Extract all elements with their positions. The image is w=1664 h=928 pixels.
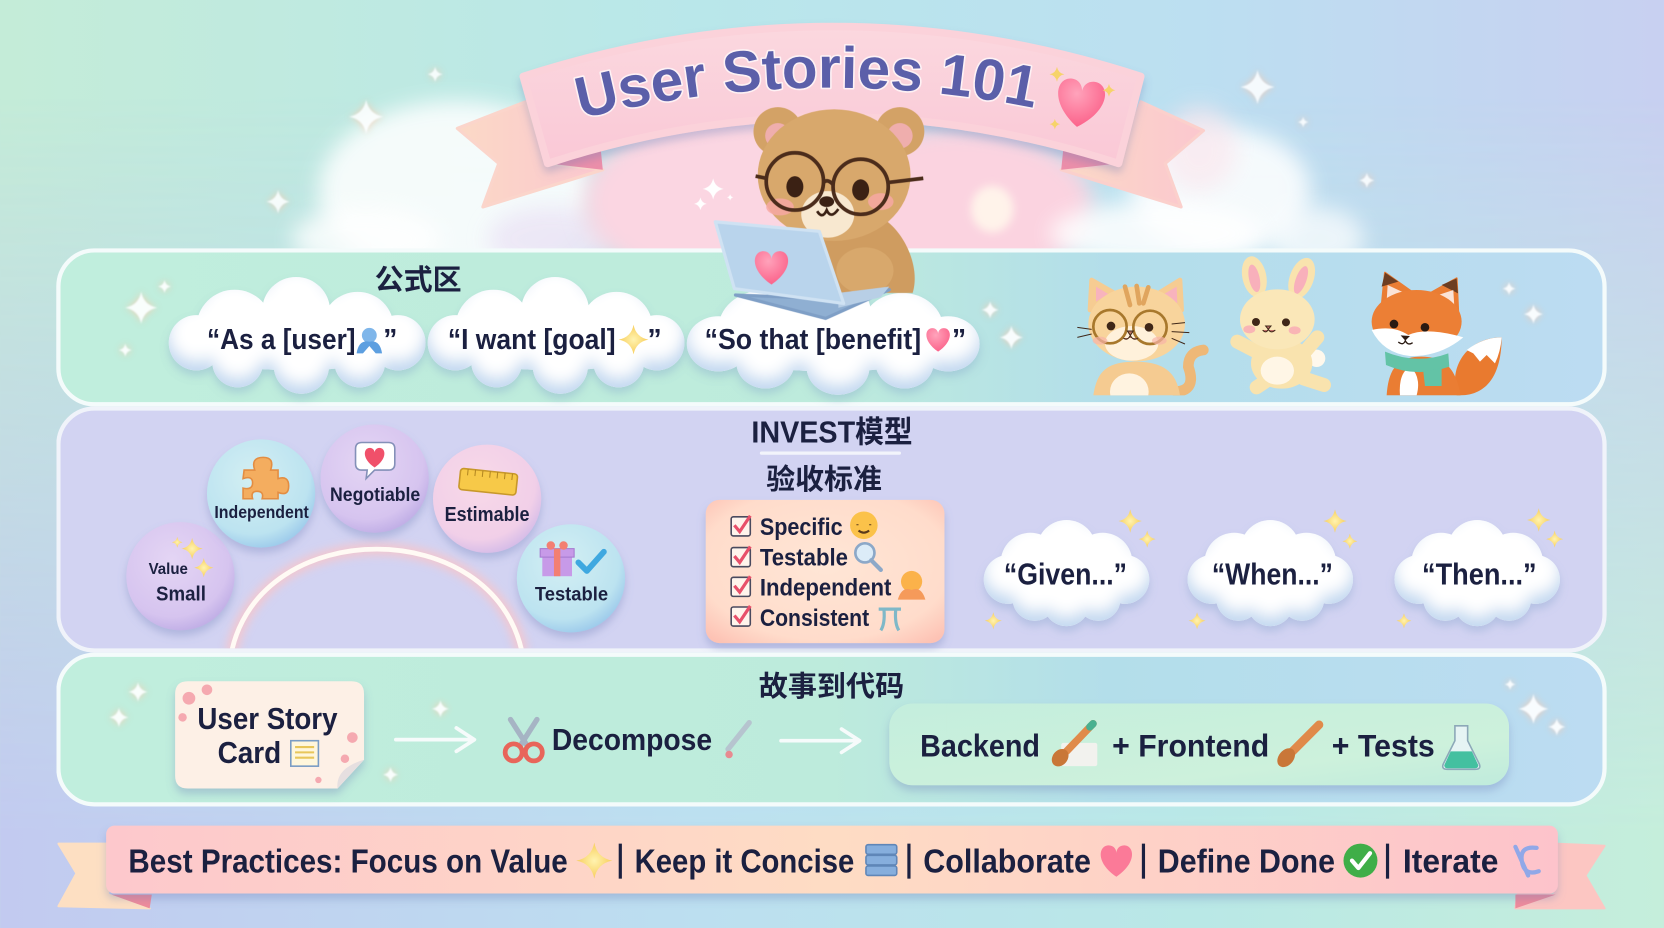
icon: gift and check	[540, 541, 604, 576]
bear cheeks	[766, 193, 894, 215]
icon: scissors	[505, 719, 542, 761]
cloud: given	[984, 509, 1156, 629]
panel: INVEST model	[58, 409, 1605, 653]
arrow: card to decompose	[396, 728, 474, 751]
panel background	[58, 250, 1605, 404]
heading: formula: 公式区	[375, 265, 462, 297]
ribbon left tail	[58, 844, 152, 908]
background clouds	[284, 90, 1371, 248]
bear ears	[753, 107, 924, 156]
item: independent: Independent	[760, 574, 891, 601]
heading: INVEST model: INVEST模型	[751, 415, 913, 450]
arrow: decompose to result	[781, 729, 860, 752]
cloud: then: “Then...”	[1422, 557, 1537, 592]
user story card: Card	[218, 735, 281, 770]
ribbon right tail	[1515, 844, 1605, 908]
best practices ribbon: Define Done	[1158, 842, 1335, 879]
badge: independent	[207, 439, 315, 548]
result pill	[889, 704, 1509, 785]
icon: pipette	[725, 723, 749, 758]
item: specific	[731, 511, 878, 541]
item: independent	[731, 571, 925, 601]
result pill: Backend	[920, 728, 1040, 764]
title: User Stories 101	[573, 44, 1036, 117]
bear body	[798, 218, 915, 293]
item: specific: Specific	[760, 514, 843, 541]
icon: heart	[926, 328, 950, 352]
icon: heart	[1101, 845, 1132, 877]
sparkles	[119, 280, 1543, 357]
cloud: as a user: ”	[383, 324, 397, 356]
badge: negotiable: Negotiable	[330, 485, 420, 506]
cloud: I want goal: “I want [goal]	[448, 324, 616, 356]
cloud: given: “Given...”	[1004, 557, 1127, 592]
badge: testable	[517, 524, 625, 632]
cloud: when	[1187, 509, 1357, 629]
icon: sparkle	[619, 325, 648, 354]
icon: iterate	[1515, 847, 1539, 875]
cloud: I want goal: ”	[647, 324, 662, 356]
icon: laptop heart	[755, 251, 788, 285]
cloud: as a user: “As a [user]	[207, 324, 356, 356]
decompose label: Decompose	[552, 722, 712, 757]
badge: small: Value	[149, 561, 188, 578]
sparkles	[109, 679, 1565, 782]
icon: title heart	[1050, 67, 1115, 130]
ribbon text: Best Practices: Focus on Value	[128, 842, 568, 879]
item: testable: Testable	[760, 545, 848, 572]
ribbon body	[106, 826, 1558, 894]
cloud: when: “When...”	[1212, 557, 1333, 592]
title banner	[456, 22, 1205, 208]
heading underline	[760, 452, 901, 455]
cloud: so that benefit: “So that [benefit]	[705, 324, 921, 356]
mascot: fox	[1372, 273, 1502, 395]
icon: user	[357, 328, 382, 353]
result pill: + Frontend	[1112, 728, 1269, 764]
badge: estimable	[433, 445, 541, 553]
icon: puzzle	[243, 457, 289, 499]
icon: speech bubble heart	[356, 443, 395, 479]
banner body	[523, 27, 1141, 163]
badge: negotiable	[321, 424, 429, 533]
bear head	[758, 109, 911, 241]
sparkles by bear	[694, 178, 733, 210]
mascot: bunny	[1237, 254, 1325, 389]
best practices ribbon: Keep it Concise	[635, 842, 854, 879]
panel background	[58, 409, 1605, 651]
bear eyes and nose	[786, 176, 869, 207]
best practices ribbon	[58, 826, 1605, 908]
panel: formula zone	[58, 250, 1605, 410]
icon: backend brush	[1048, 724, 1097, 770]
best practices ribbon: Iterate	[1403, 842, 1498, 879]
item: testable	[731, 543, 881, 572]
panel background	[58, 655, 1605, 804]
bear arm	[836, 247, 894, 294]
laptop	[715, 222, 889, 318]
heading: story to code: 故事到代码	[759, 671, 904, 703]
heading: acceptance criteria: 验收标准	[766, 464, 882, 496]
checklist card	[706, 500, 944, 643]
cloud: I want goal	[428, 277, 684, 394]
icon: check	[1343, 844, 1377, 878]
item: consistent: Consistent	[760, 605, 869, 632]
cloud: as a user	[169, 277, 426, 394]
user story card: User Story	[197, 701, 337, 736]
banner right tail	[1061, 102, 1203, 207]
bear glasses	[756, 153, 923, 214]
icon: value stars	[172, 537, 213, 577]
badge: independent: Independent	[214, 502, 309, 522]
panel: story to code	[58, 655, 1605, 804]
mascot: cat	[1077, 280, 1203, 410]
icon: frontend brush	[1274, 725, 1319, 771]
mascot: bear with laptop	[694, 107, 924, 318]
result pill: + Tests	[1332, 728, 1435, 764]
badge: estimable: Estimable	[445, 504, 530, 526]
badge: small: Small	[156, 584, 206, 606]
cloud: so that benefit: ”	[952, 324, 966, 356]
badge: testable: Testable	[535, 584, 608, 606]
cloud: so that benefit	[687, 278, 980, 395]
best practices ribbon: Collaborate	[923, 842, 1091, 879]
card blossoms	[178, 684, 358, 783]
user story card	[175, 681, 364, 788]
icon: ruler	[459, 468, 518, 495]
decorative sparkles: sky	[266, 67, 1374, 213]
icon: sparkle	[576, 843, 612, 879]
banner left tail	[457, 102, 603, 207]
cloud: then	[1394, 508, 1563, 628]
badge: small	[126, 522, 235, 630]
icon: document	[291, 741, 318, 766]
rainbow arc	[231, 549, 522, 653]
icon: database	[866, 845, 897, 875]
icon: flask	[1443, 726, 1480, 769]
